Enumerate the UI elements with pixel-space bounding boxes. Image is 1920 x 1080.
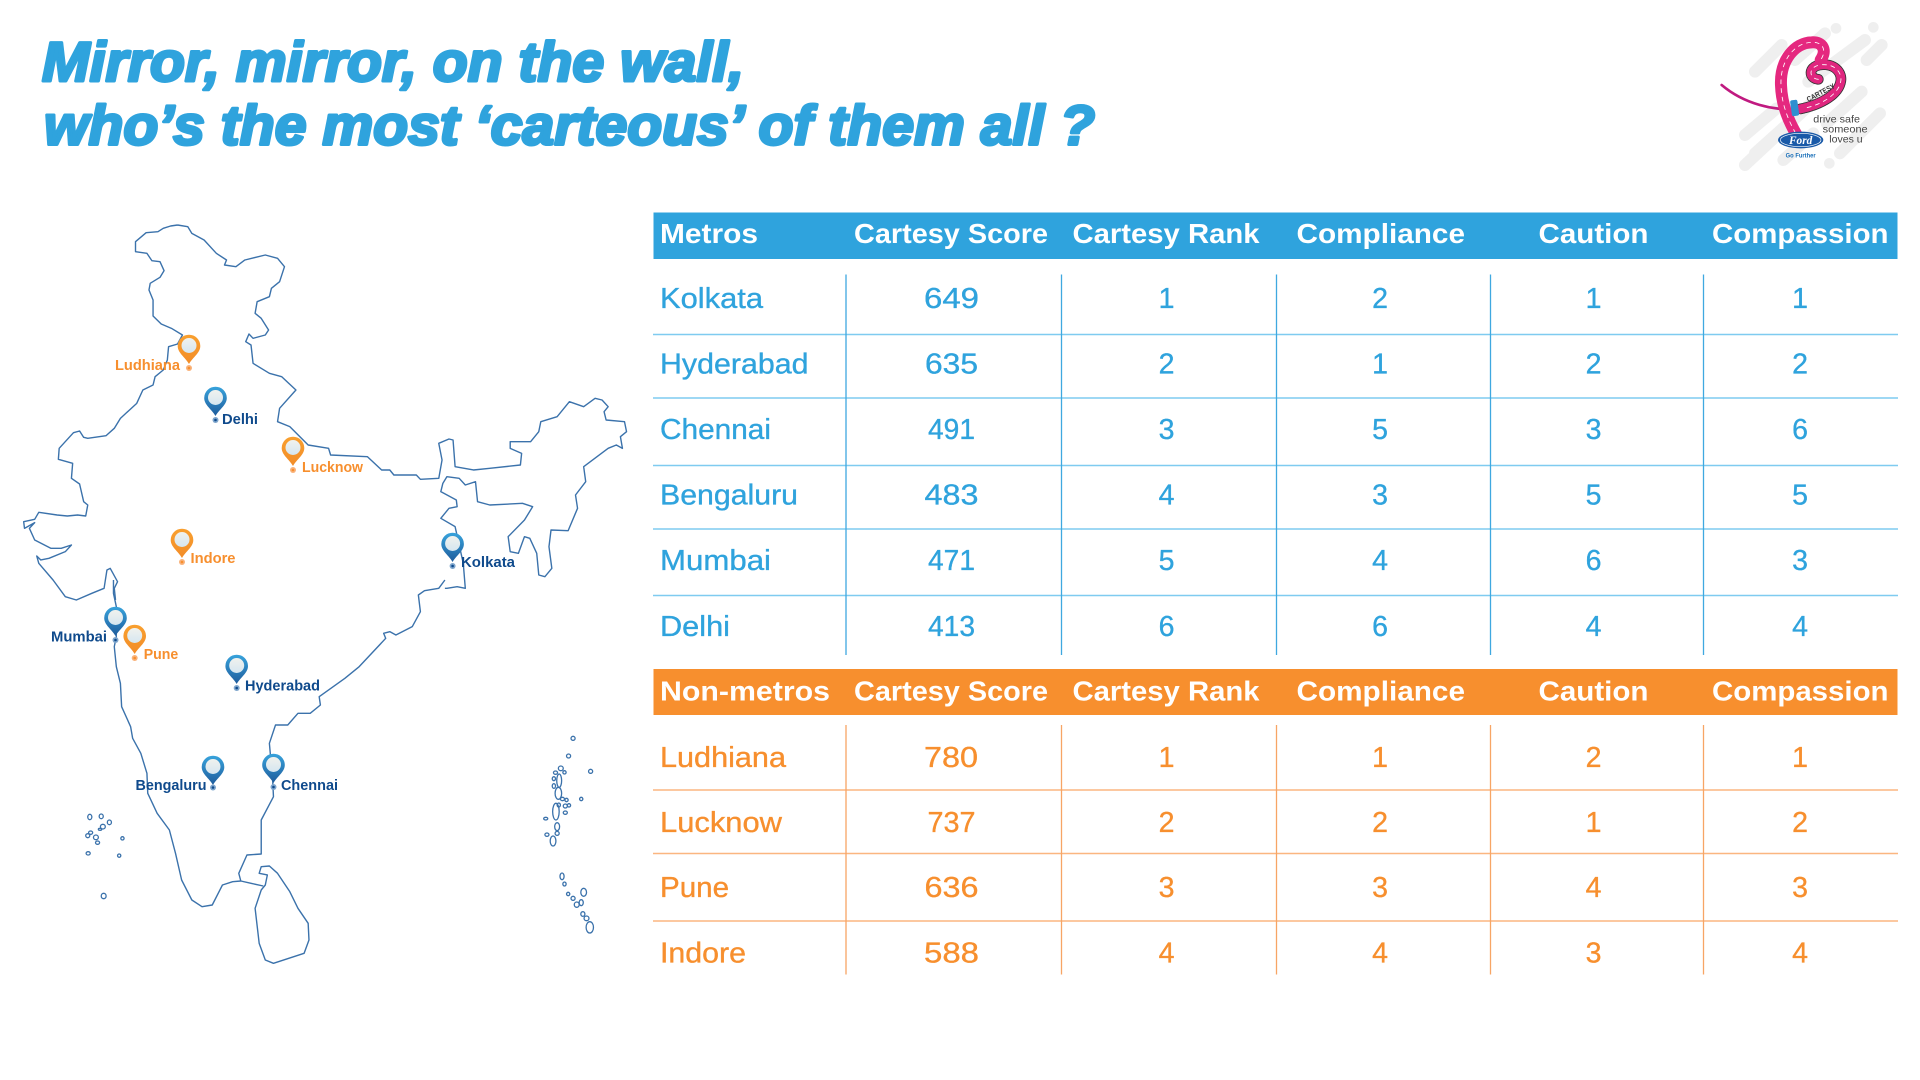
pin: Chennai: Chennai xyxy=(281,778,338,794)
metros header bar xyxy=(654,212,1898,259)
row: Hyderabad: 1 xyxy=(1372,348,1388,380)
pin: Lucknow: Lucknow xyxy=(302,460,364,476)
row: Pune: 3 xyxy=(1792,872,1808,904)
Lakshadweep islands xyxy=(86,814,124,899)
row: Chennai: Chennai xyxy=(660,414,771,446)
row: Kolkata: 649 xyxy=(924,283,979,315)
row: Chennai: 6 xyxy=(1792,414,1808,446)
map outline: Sri Lanka xyxy=(255,866,309,963)
logo tagline: someone xyxy=(1823,125,1868,136)
pin: Pune xyxy=(123,625,178,663)
row: Mumbai: 4 xyxy=(1372,545,1388,577)
pin: Bengaluru xyxy=(136,756,224,794)
row: Pune: 3 xyxy=(1372,872,1388,904)
row: Pune: 636 xyxy=(924,872,978,904)
logo tagline: drive safe xyxy=(1813,114,1860,125)
non-metros column headers: Cartesy Score xyxy=(854,676,1048,706)
row: Lucknow: 2 xyxy=(1159,807,1174,839)
pin: Delhi xyxy=(204,387,258,428)
non-metros column headers: Compassion xyxy=(1712,676,1888,706)
row: Lucknow: 2 xyxy=(1372,807,1388,839)
logo: Ford Cartesy heart xyxy=(1722,22,1882,169)
row: Hyderabad xyxy=(660,348,1808,380)
row: Lucknow: 1 xyxy=(1586,807,1601,839)
non-metros column headers: Non-metros xyxy=(660,676,830,706)
row: Delhi: Delhi xyxy=(660,611,730,643)
non-metros column headers: Compliance xyxy=(1296,676,1465,706)
row: Ludhiana: 1 xyxy=(1792,742,1808,774)
row: Bengaluru: 5 xyxy=(1792,480,1808,512)
row: Lucknow: 737 xyxy=(928,807,976,839)
row: Bengaluru xyxy=(660,480,1808,512)
pin: Hyderabad: Hyderabad xyxy=(245,678,320,694)
logo Ford oval: Ford xyxy=(1788,135,1813,147)
metros column headers: Compliance xyxy=(1296,218,1465,249)
row: Indore: 4 xyxy=(1792,938,1808,970)
row: Mumbai: Mumbai xyxy=(660,545,771,577)
pin: Hyderabad xyxy=(225,655,320,694)
pin: Ludhiana: Ludhiana xyxy=(115,358,181,374)
row: Chennai: 3 xyxy=(1159,414,1174,446)
row: Pune: 4 xyxy=(1586,872,1602,904)
row: Indore: 4 xyxy=(1159,938,1175,970)
metros column headers: Cartesy Score xyxy=(854,218,1048,249)
row: Bengaluru: 4 xyxy=(1159,480,1175,512)
row: Pune xyxy=(660,872,1808,904)
map of India xyxy=(24,225,627,963)
row: Chennai: 3 xyxy=(1586,414,1601,446)
title: Mirror, mirror, on the wall, xyxy=(42,30,744,93)
row: Delhi: 6 xyxy=(1159,611,1174,643)
row: Kolkata: 1 xyxy=(1586,283,1601,315)
row: Indore: 4 xyxy=(1372,938,1388,970)
pin: Lucknow xyxy=(282,437,364,476)
row: Kolkata: 1 xyxy=(1792,283,1808,315)
row: Indore: 3 xyxy=(1586,938,1601,970)
row: Mumbai: 471 xyxy=(928,545,975,577)
metros column headers: Metros xyxy=(660,218,758,249)
row: Mumbai: 6 xyxy=(1586,545,1601,577)
row: Ludhiana xyxy=(660,742,1808,774)
row: Ludhiana: 1 xyxy=(1159,742,1174,774)
row: Ludhiana: 780 xyxy=(924,742,978,774)
row: Chennai xyxy=(660,414,1808,446)
metros column headers: Compassion xyxy=(1712,218,1888,249)
panel: non-metros table xyxy=(653,669,1898,974)
row: Hyderabad: Hyderabad xyxy=(660,348,808,380)
logo CARTESY label: CARTESY xyxy=(1805,81,1836,104)
pin: Kolkata xyxy=(441,533,516,571)
title xyxy=(42,30,1095,156)
row: Hyderabad: 635 xyxy=(925,348,978,380)
row: Chennai: 5 xyxy=(1372,414,1388,446)
pin: Ludhiana xyxy=(115,335,200,374)
row: Indore: 588 xyxy=(924,938,979,970)
row: Pune: Pune xyxy=(660,872,729,904)
map outline: south xyxy=(113,580,445,907)
pin: Chennai xyxy=(262,754,338,794)
row: Lucknow: Lucknow xyxy=(660,807,782,839)
row: Delhi: 4 xyxy=(1792,611,1808,643)
row: Mumbai: 5 xyxy=(1159,545,1174,577)
pin: Mumbai xyxy=(51,607,127,646)
row: Mumbai xyxy=(660,545,1808,577)
logo tagline xyxy=(1813,114,1868,145)
row: Indore xyxy=(660,938,1808,970)
row: Chennai: 491 xyxy=(928,414,975,446)
row: Bengaluru: 5 xyxy=(1586,480,1601,512)
row: Delhi: 4 xyxy=(1586,611,1602,643)
row: Delhi xyxy=(660,611,1808,643)
row: Kolkata xyxy=(660,283,1808,315)
logo Ford oval xyxy=(1778,132,1823,148)
row: Lucknow xyxy=(660,807,1808,839)
row: Ludhiana: Ludhiana xyxy=(660,742,786,774)
pin: Bengaluru: Bengaluru xyxy=(136,778,206,794)
pin: Indore: Indore xyxy=(190,551,236,567)
non-metros column headers: Caution xyxy=(1538,676,1648,706)
row: Kolkata: Kolkata xyxy=(660,283,763,315)
row: Delhi: 413 xyxy=(928,611,975,643)
map outline: north xyxy=(24,225,627,600)
Andaman and Nicobar islands xyxy=(544,736,593,933)
pin: Pune: Pune xyxy=(144,647,178,663)
row: Indore: Indore xyxy=(660,938,746,970)
row: Lucknow: 2 xyxy=(1792,807,1808,839)
pin: Delhi: Delhi xyxy=(222,412,258,428)
row: Bengaluru: 3 xyxy=(1372,480,1388,512)
row: Delhi: 6 xyxy=(1372,611,1388,643)
pin: Indore xyxy=(171,529,236,567)
row: Bengaluru: 483 xyxy=(924,480,978,512)
title: who’s the most ‘carteous’ of them all ? xyxy=(44,94,1095,156)
row: Pune: 3 xyxy=(1159,872,1174,904)
row: Ludhiana: 1 xyxy=(1372,742,1388,774)
metros column headers xyxy=(660,218,1888,249)
row: Kolkata: 1 xyxy=(1159,283,1174,315)
non-metros header bar xyxy=(654,669,1898,715)
row: Kolkata: 2 xyxy=(1372,283,1388,315)
row: Hyderabad: 2 xyxy=(1586,348,1601,380)
pin: Mumbai: Mumbai xyxy=(51,630,107,646)
metros column headers: Cartesy Rank xyxy=(1072,218,1260,249)
row: Bengaluru: Bengaluru xyxy=(660,480,798,512)
metros column headers: Caution xyxy=(1538,218,1648,249)
non-metros column headers xyxy=(660,676,1888,706)
row: Hyderabad: 2 xyxy=(1159,348,1174,380)
row: Ludhiana: 2 xyxy=(1586,742,1601,774)
logo road heart xyxy=(1722,42,1841,141)
row: Mumbai: 3 xyxy=(1792,545,1808,577)
logo Go Further: Go Further xyxy=(1786,152,1816,159)
non-metros column headers: Cartesy Rank xyxy=(1072,676,1260,706)
logo background stripes xyxy=(1745,22,1882,169)
row: Hyderabad: 2 xyxy=(1792,348,1808,380)
logo tagline: loves u xyxy=(1829,134,1863,145)
panel: metros table xyxy=(653,212,1898,655)
pin: Kolkata: Kolkata xyxy=(461,555,516,571)
